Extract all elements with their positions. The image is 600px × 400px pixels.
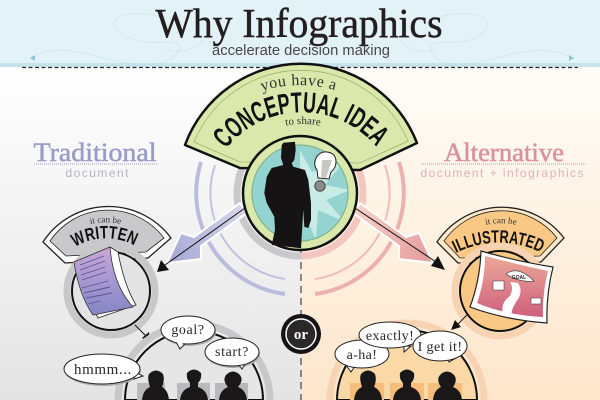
- center dashed divider: [300, 250, 302, 400]
- fan: written: [42, 206, 172, 264]
- bubble: a-ha!: a-ha!: [347, 348, 377, 363]
- rings: right: [301, 162, 406, 296]
- goal sign and road: [506, 271, 534, 281]
- fan text: it can be: it can be: [485, 217, 516, 225]
- fan text: it can be: it can be: [90, 216, 121, 224]
- fan text: written: WRITTEN: [70, 226, 139, 246]
- header band: [0, 0, 600, 67]
- heading: traditional: Traditional: [34, 138, 156, 167]
- bubble: I get it!: I get it!: [418, 340, 462, 355]
- fan text: you have a: you have a: [260, 74, 336, 94]
- audience: alternative: [330, 323, 484, 400]
- circle: illustrated document: GOAL: [512, 275, 526, 281]
- bubble: I get it!: [413, 331, 467, 362]
- bubble: goal?: [161, 316, 216, 349]
- arrow: to illustrated: [355, 208, 445, 270]
- bubble: start?: start?: [215, 345, 249, 360]
- heading: traditional: document: [66, 166, 129, 180]
- lightbulb: [315, 152, 336, 191]
- arrow: illustrated to audience: [451, 315, 467, 330]
- fan: illustrated: [436, 206, 565, 264]
- bubble: hmmm: [64, 354, 143, 386]
- heading: traditional: [34, 138, 158, 180]
- fan text: to share: to share: [285, 116, 320, 126]
- fan text: illustrated: ILLUSTRATED: [451, 230, 544, 253]
- central circle: person with idea: [243, 136, 357, 250]
- subtitle: accelerate decision making: [212, 42, 390, 59]
- fan text: conceptual idea: CONCEPTUAL IDEA: [214, 92, 388, 146]
- rings: left: [194, 162, 301, 296]
- arrow: written to audience: [135, 325, 150, 342]
- bubble: start?: [205, 338, 260, 369]
- dashed divider: [22, 66, 578, 68]
- flourish: right: [402, 14, 574, 65]
- heading: alternative: Alternative: [444, 138, 564, 167]
- flourish: left: [30, 14, 202, 65]
- big arrow: blue: [167, 203, 247, 263]
- heading: alternative: document + infographics: [420, 166, 584, 180]
- or badge: or: [294, 327, 308, 343]
- circle: written document: [67, 247, 155, 335]
- big arrow: pink: [353, 203, 433, 263]
- bubble: exactly!: [359, 322, 421, 352]
- audience: traditional: [118, 324, 270, 400]
- fan: conceptual idea: [184, 62, 418, 172]
- silhouette: [264, 142, 311, 248]
- bubble: hmmm: hmmm...: [74, 362, 132, 378]
- circle: illustrated document: [455, 246, 553, 336]
- bubble: a-ha!: [335, 340, 389, 372]
- bubble: exactly!: exactly!: [366, 329, 414, 344]
- or badge: [281, 314, 321, 354]
- bubble: goal?: goal?: [171, 323, 205, 338]
- title: Why Infographics: [156, 0, 442, 46]
- heading: alternative: [420, 138, 587, 180]
- arrow: to written: [157, 208, 245, 272]
